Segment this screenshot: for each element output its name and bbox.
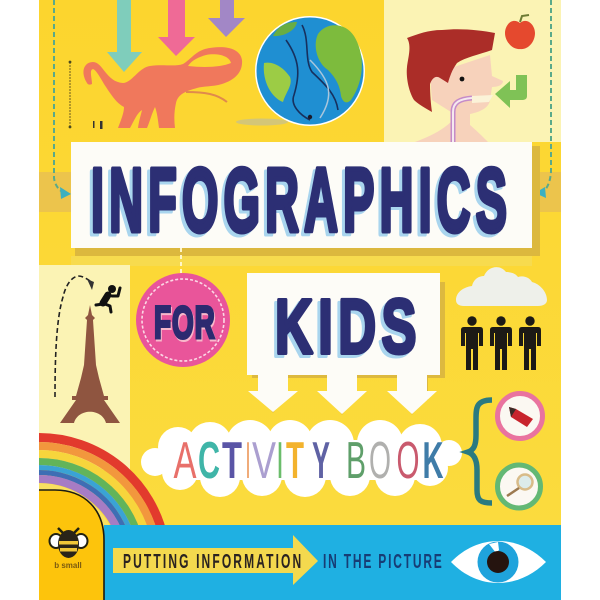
person 1 [461, 316, 483, 370]
kids box with arrows [247, 273, 445, 415]
publisher corner [39, 490, 104, 600]
arrow: teal [107, 0, 142, 72]
jump path dashed [55, 276, 94, 397]
badge: for [136, 273, 230, 367]
kids text: KIDS [272, 286, 413, 372]
activity book text: V [252, 432, 276, 490]
dashed line left [54, 0, 71, 199]
subtitle text left: PUTTING INFORMATION [123, 551, 301, 573]
activity book text: K [422, 432, 444, 490]
scale line [69, 61, 102, 129]
icon: magnifier circle [498, 465, 540, 508]
publisher name: b small [54, 561, 82, 570]
icon: apple [505, 15, 535, 49]
icon: jumping figure [96, 285, 120, 312]
arrow: green return [495, 75, 527, 108]
activity book text: I [246, 432, 250, 490]
icon: boy profile [407, 29, 503, 142]
panel: cream left [39, 265, 130, 470]
blue band [104, 525, 561, 600]
activity book text: O [369, 432, 391, 490]
activity book text: T [222, 432, 242, 490]
arrow: purple [208, 0, 245, 37]
subtitle arrow banner [113, 535, 318, 585]
icon: globe [236, 16, 365, 126]
activity book text: A [174, 432, 197, 490]
arrow: pink [158, 0, 195, 56]
panel: cream top right [384, 0, 561, 142]
title text: INFOGRAPHICS [91, 151, 507, 251]
activity book text [174, 432, 444, 490]
subtitle text right: IN THE PICTURE [323, 551, 442, 573]
activity book text: O [396, 432, 420, 490]
title text: INFOGRAPHICS [88, 154, 504, 254]
dashed line right [535, 0, 551, 198]
person 3 [519, 316, 541, 370]
badge: for: FOR [154, 297, 215, 348]
activity book text: I [278, 432, 282, 490]
dashed link to for badge [180, 248, 182, 273]
title box [71, 142, 540, 256]
icon: pencil circle [498, 394, 542, 438]
icon: cloud small [456, 267, 547, 306]
badge: for: FOR [155, 299, 216, 350]
activity book text: B [346, 432, 366, 490]
kids text: KIDS [275, 283, 416, 369]
icon: rainbow [39, 438, 164, 540]
curly brace [468, 400, 492, 503]
activity book cloud [141, 420, 462, 497]
person 2 [490, 316, 512, 370]
icon: eye [451, 541, 546, 583]
activity book text: C [198, 432, 220, 490]
icon: eiffel tower [60, 305, 120, 423]
icon: dinosaur [83, 47, 242, 128]
icon: three people [461, 316, 541, 370]
activity book text: T [286, 432, 304, 490]
icon: bee logo [50, 528, 88, 558]
activity book text: Y [312, 432, 330, 490]
